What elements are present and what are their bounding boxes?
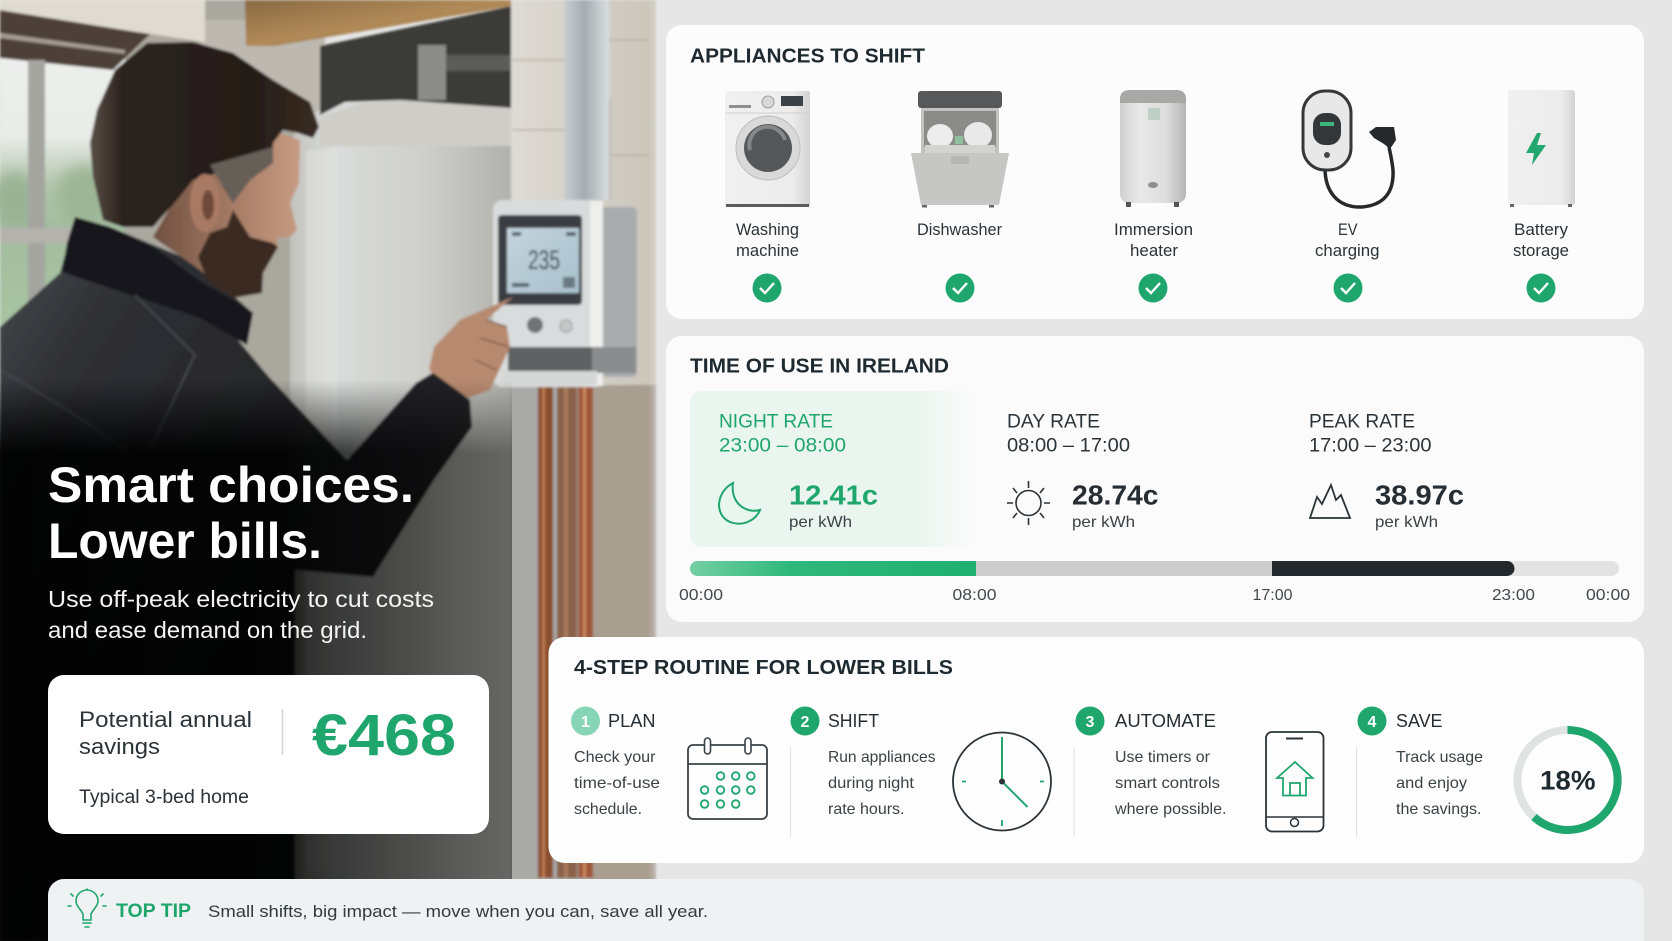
dark text overlay xyxy=(0,380,512,941)
timeline labels xyxy=(679,587,1630,604)
appliance labels: heater xyxy=(1130,242,1179,260)
step 4: save: the savings. xyxy=(1396,801,1482,818)
step 4: save: 4 xyxy=(1368,714,1377,731)
savings caption: Typical 3-bed home xyxy=(79,787,249,808)
peak rate xyxy=(1309,412,1464,531)
timeline labels: 23:00 xyxy=(1492,587,1535,604)
appliance labels: storage xyxy=(1513,242,1569,260)
step 2: shift: rate hours. xyxy=(828,801,904,818)
step 4: save: and enjoy xyxy=(1396,775,1467,792)
step 1: plan: 1 xyxy=(581,714,590,731)
icon: phone with house xyxy=(1266,732,1324,832)
step 1: plan: Check your xyxy=(574,749,656,766)
night rate card: 23:00 – 08:00 xyxy=(719,436,846,456)
icon: calendar xyxy=(688,738,767,819)
heading: APPLIANCES TO SHIFT xyxy=(690,46,925,68)
night rate card: per kWh xyxy=(789,514,852,531)
appliance labels: Immersion xyxy=(1114,221,1193,239)
smart meter xyxy=(493,200,637,387)
ring chart: 18%: 18% xyxy=(1540,766,1596,796)
heading: 4-STEP ROUTINE FOR LOWER BILLS xyxy=(574,657,953,679)
appliance labels: EV xyxy=(1338,221,1358,239)
hero title: Lower bills. xyxy=(48,513,322,569)
check marks xyxy=(752,274,1556,302)
man: hand on the meter xyxy=(429,297,513,398)
appliance labels xyxy=(736,221,1569,260)
immersion heater xyxy=(1120,90,1186,207)
day rate: 08:00 – 17:00 xyxy=(1007,436,1130,456)
hero subtitle: Use off-peak electricity to cut costs xyxy=(48,586,434,612)
step 1: plan xyxy=(571,706,767,819)
step 2: shift: 2 xyxy=(801,714,810,731)
dishwasher xyxy=(911,91,1009,208)
step 2: shift: Run appliances xyxy=(828,749,936,766)
peak rate: PEAK RATE xyxy=(1309,412,1415,432)
EV charger xyxy=(1303,91,1396,207)
wall xyxy=(100,0,315,941)
panel: time of use in Ireland xyxy=(666,336,1644,622)
icon: light bulb xyxy=(68,889,106,927)
step 3: automate: Use timers or xyxy=(1115,749,1211,766)
panel: 4-step routine xyxy=(548,637,1644,863)
step 2: shift: during night xyxy=(828,775,915,792)
panel: top tip xyxy=(48,879,1644,941)
step 3: automate: where possible. xyxy=(1114,801,1226,818)
peak rate: per kWh xyxy=(1375,514,1438,531)
step 1: plan: PLAN xyxy=(608,711,656,731)
step 3: automate xyxy=(1076,706,1324,832)
appliance labels: machine xyxy=(736,242,799,260)
ring chart: 18% xyxy=(1518,730,1618,830)
panel: potential annual savings xyxy=(48,675,489,834)
tip label: TOP TIP xyxy=(116,901,191,922)
peak rate: 38.97c xyxy=(1375,480,1464,510)
step 2: shift xyxy=(790,706,1051,830)
hero subtitle xyxy=(48,586,434,643)
dark void and flue pipe xyxy=(320,6,512,115)
appliance labels: Dishwasher xyxy=(917,221,1002,239)
icon: moon xyxy=(719,483,760,524)
day rate: 28.74c xyxy=(1072,480,1158,510)
timeline labels: 00:00 xyxy=(1586,587,1630,604)
brick pillar xyxy=(510,0,656,941)
day rate: DAY RATE xyxy=(1007,412,1100,432)
wooden beam xyxy=(245,0,512,46)
panel: potential annual savings: savings xyxy=(79,734,160,759)
window frame xyxy=(0,0,205,330)
icon: sun xyxy=(1007,481,1050,525)
hero title: Smart choices. xyxy=(48,457,414,513)
washing machine xyxy=(725,91,810,207)
timeline labels: 17:00 xyxy=(1252,587,1293,604)
step 4: save: SAVE xyxy=(1396,711,1442,731)
night rate card: 12.41c xyxy=(789,480,878,510)
man: head xyxy=(90,42,319,298)
window view xyxy=(0,40,125,340)
step 1: plan: schedule. xyxy=(574,801,642,818)
appliance labels: Washing xyxy=(736,221,799,239)
savings figure: €468 xyxy=(312,703,456,768)
timeline labels: 08:00 xyxy=(952,587,997,604)
panel: appliances to shift xyxy=(666,25,1644,319)
step 2: shift: SHIFT xyxy=(828,711,879,731)
timeline labels: 00:00 xyxy=(679,587,723,604)
smart meter: 235 xyxy=(528,245,560,275)
hero title xyxy=(48,457,414,569)
step 1: plan: time-of-use xyxy=(574,775,660,792)
step 3: automate: 3 xyxy=(1086,714,1095,731)
day rate xyxy=(1007,412,1158,531)
day rate: per kWh xyxy=(1072,514,1135,531)
icon: peak mountain xyxy=(1310,485,1350,518)
24-hour timeline bar xyxy=(690,561,1619,576)
hot water tank xyxy=(290,98,512,941)
night rate card xyxy=(690,391,976,547)
peak rate: 17:00 – 23:00 xyxy=(1309,436,1432,456)
icon: clock xyxy=(953,732,1051,830)
battery storage xyxy=(1508,90,1575,207)
appliance labels: Battery xyxy=(1514,221,1569,239)
photo: man adjusting a smart meter beside a hot water tank xyxy=(0,0,658,941)
man: jacket xyxy=(0,217,472,941)
copper pipes xyxy=(538,385,593,878)
appliance labels: charging xyxy=(1315,242,1380,260)
hero subtitle: and ease demand on the grid. xyxy=(48,617,367,643)
tip text: Small shifts, big impact — move when you can, save all year. xyxy=(208,902,708,921)
night rate card: NIGHT RATE xyxy=(719,412,833,432)
heading: TIME OF USE IN IRELAND xyxy=(690,356,949,378)
panel: potential annual savings: Potential annual xyxy=(79,707,252,732)
step 4: save xyxy=(1358,706,1618,830)
edge fade xyxy=(648,0,672,941)
step 3: automate: AUTOMATE xyxy=(1115,711,1216,731)
step 4: save: Track usage xyxy=(1396,749,1483,766)
step 3: automate: smart controls xyxy=(1115,775,1220,792)
